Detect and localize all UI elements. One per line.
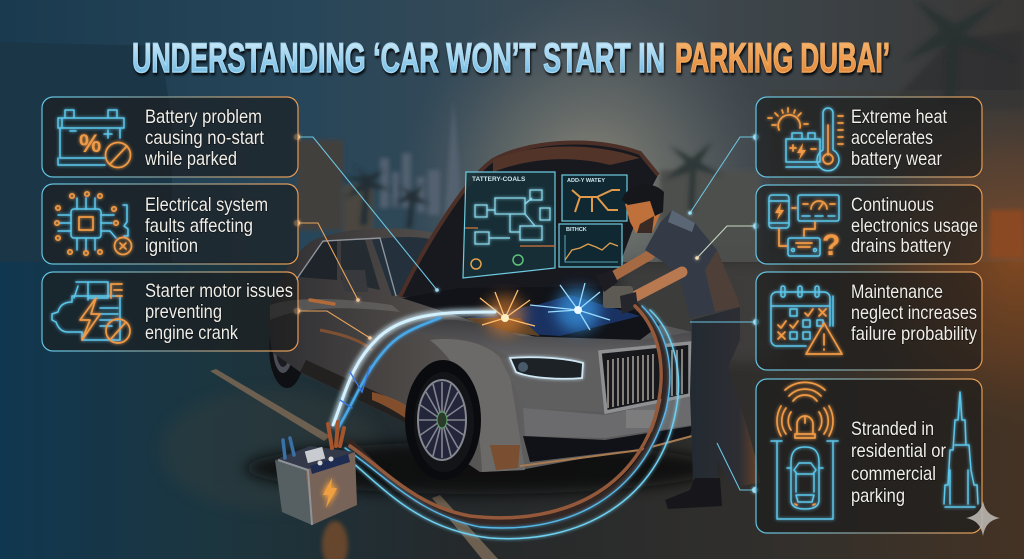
text: continuous electronics: electronics usage <box>851 215 978 237</box>
text: battery problem <box>144 106 264 170</box>
text: continuous electronics: drains battery <box>851 235 951 257</box>
text: starter motor <box>145 280 293 344</box>
text: extreme heat <box>851 106 947 170</box>
text: electrical system <box>145 194 268 257</box>
text: stranded in parking <box>851 418 946 507</box>
grille <box>600 343 690 412</box>
ground <box>0 262 1024 559</box>
icon: bolt on jump starter <box>323 478 337 508</box>
icon: phone, dashboard, radio and question mark: ? <box>822 229 840 262</box>
panel: electrical system <box>42 184 298 264</box>
text: stranded in parking: Stranded in <box>851 418 934 440</box>
text: starter motor: engine crank <box>145 322 238 344</box>
icon: alarm beacon and car in parking bay <box>771 382 838 519</box>
text: battery problem: causing no-start <box>145 127 264 149</box>
icon: battery with prohibition sign <box>58 110 130 168</box>
screen: line chart <box>559 224 622 267</box>
screen: line chart: BITHCK <box>566 227 587 233</box>
text: maintenance neglect <box>851 281 977 345</box>
connector lines <box>294 134 759 493</box>
text: continuous electronics: Continuous <box>851 194 934 216</box>
text: maintenance neglect: neglect increases <box>851 302 977 324</box>
icon: sun, battery and thermometer <box>768 108 843 171</box>
text: battery problem: while parked <box>144 148 237 170</box>
holographic diagnostic screens <box>463 172 627 278</box>
car body <box>268 228 694 472</box>
head <box>622 184 664 233</box>
text: electrical system: Electrical system <box>145 194 268 216</box>
title: UNDERSTANDING ‘CAR WON’T START IN <box>132 34 665 81</box>
front wheel <box>405 360 481 480</box>
jump cables <box>333 306 678 539</box>
screen: wiring diagram <box>463 172 555 278</box>
car <box>245 143 715 494</box>
text: electrical system: faults affecting <box>145 215 253 237</box>
title: PARKING DUBAI’ <box>675 34 890 81</box>
text: maintenance neglect: Maintenance <box>851 281 943 303</box>
front hood surface <box>376 319 692 358</box>
engine bay <box>402 286 660 340</box>
text: starter motor: Starter motor issues <box>145 280 293 302</box>
buildings and palms <box>0 0 1024 300</box>
gloves and tester <box>603 286 633 308</box>
parking line <box>210 369 498 559</box>
screen: wiring diagram: TATTERY-COALS <box>472 176 526 183</box>
icon: battery with prohibition sign: % <box>79 130 101 158</box>
text: extreme heat: Extreme heat <box>851 106 947 128</box>
hood raised <box>400 143 658 297</box>
mechanic legs <box>690 307 760 487</box>
text: stranded in parking: commercial <box>851 463 936 485</box>
mechanic <box>596 184 760 509</box>
screen: circuit: ADD-Y WATEY <box>567 178 605 184</box>
text: continuous electronics <box>851 194 978 257</box>
panel: extreme heat <box>756 97 982 177</box>
icon: phone, dashboard, radio and question mark <box>769 195 840 262</box>
far arm <box>612 255 650 277</box>
front fender highlight <box>430 339 525 472</box>
panel: battery problem <box>42 97 298 177</box>
panel: continuous electronics <box>756 185 982 264</box>
Dubai skyline <box>380 100 462 225</box>
text: battery problem: Battery problem <box>145 106 262 128</box>
text: electrical system: ignition <box>145 235 198 257</box>
text: maintenance neglect: failure probability <box>851 323 977 345</box>
icon: circuit chip <box>55 192 131 255</box>
panel: maintenance neglect <box>756 272 982 370</box>
icon: Burj Khalifa <box>944 392 978 507</box>
text: extreme heat: accelerates <box>851 127 933 149</box>
windows <box>296 237 434 304</box>
icon: starter motor <box>52 282 130 343</box>
text: stranded in parking: parking <box>851 485 905 507</box>
panel: starter motor <box>42 272 298 351</box>
screen: circuit <box>562 175 627 221</box>
text: starter motor: preventing <box>145 301 222 323</box>
bumper <box>523 396 692 438</box>
headlight <box>510 357 583 379</box>
torso <box>645 210 740 318</box>
text: extreme heat: battery wear <box>851 148 942 170</box>
icon: calendar with warning triangle <box>771 286 842 354</box>
sparks on battery <box>480 283 610 335</box>
panel: stranded in parking <box>756 379 982 533</box>
boot <box>665 478 722 509</box>
text: stranded in parking: residential or <box>851 440 946 462</box>
rear wheel <box>269 308 305 388</box>
near arm <box>636 272 682 296</box>
icon: sparkle watermark <box>966 501 1000 536</box>
portable jump starter <box>275 422 357 525</box>
